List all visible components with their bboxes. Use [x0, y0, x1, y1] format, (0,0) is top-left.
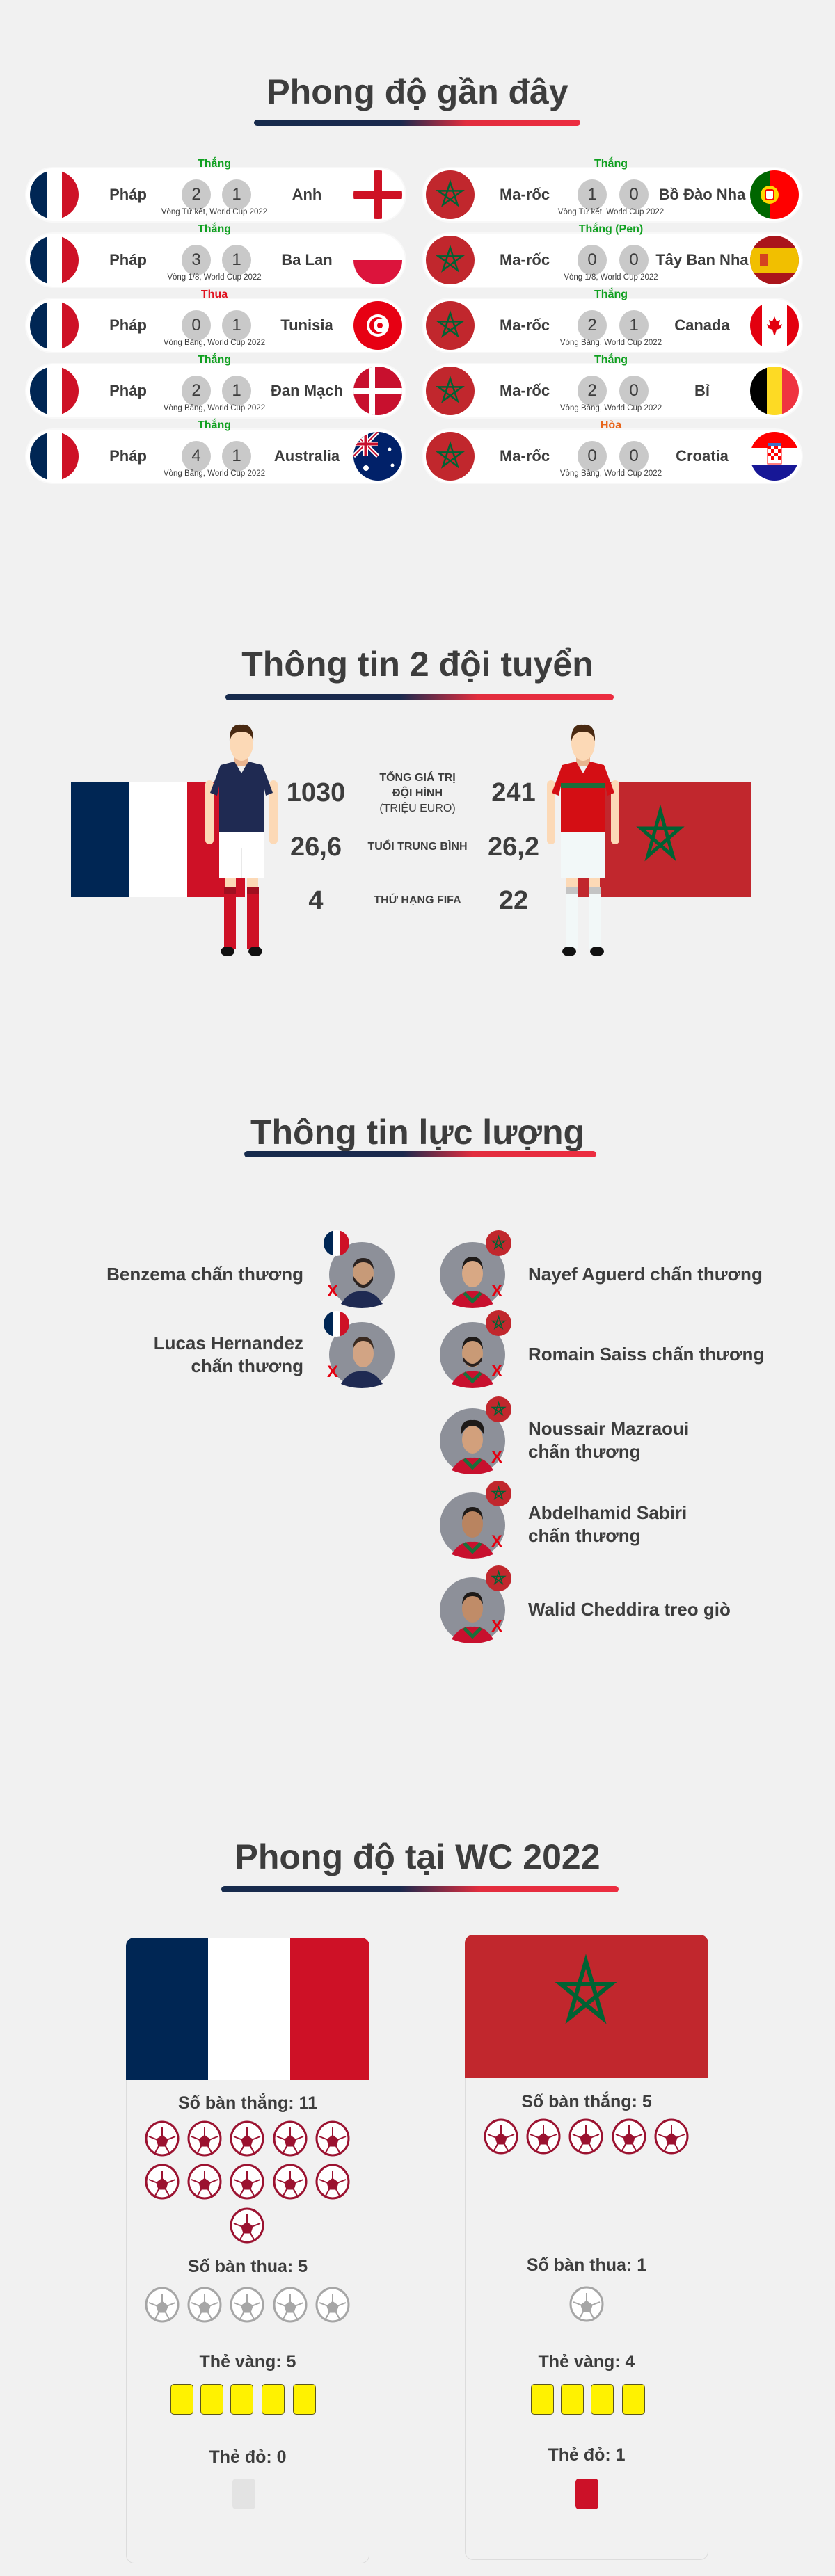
illustration: Morocco player [547, 725, 619, 956]
row: Noussair Mazraoui: chấn thương [528, 1441, 641, 1462]
stat: squad value: 1030 [287, 778, 345, 807]
photo: Lucas Hernandez [329, 1322, 395, 1388]
heading: goals conceded: Số bàn thua: 1 [527, 2255, 646, 2275]
panel: recent form France: Thua [201, 289, 228, 300]
heading: red cards: Thẻ đỏ: 1 [548, 2445, 626, 2465]
stat: average age: 26,6 [290, 832, 342, 862]
match: Morocco vs Spain: Tây Ban Nha [655, 251, 749, 268]
match: France vs England: Vòng Tứ kết, World Cup 2022 [161, 208, 267, 216]
badge: France flag [324, 1311, 349, 1337]
panel: recent form France: Thắng [198, 158, 231, 170]
match: France vs Poland: 1 [232, 250, 241, 269]
flag: France [71, 782, 245, 897]
heading: red cards: Thẻ đỏ: 0 [209, 2447, 287, 2467]
icon: grey ball [569, 2287, 604, 2321]
row: Romain Saiss [440, 1310, 764, 1388]
photo: Benzema [329, 1242, 395, 1308]
match: Morocco vs Belgium: Bỉ [694, 382, 710, 399]
match: Morocco vs Canada: 1 [629, 316, 639, 335]
text: Lucas Hernandez [154, 1333, 303, 1376]
row: Nayef Aguerd [440, 1230, 763, 1308]
match: France vs Tunisia [26, 299, 405, 352]
match: Morocco vs Croatia: 0 [629, 446, 639, 465]
match: Morocco vs Croatia: Croatia [676, 447, 729, 465]
match: Morocco vs Canada: Ma-rốc [500, 316, 550, 334]
match: France vs Australia: 4 [191, 446, 201, 465]
stat: average age: 26,2 [488, 832, 539, 862]
row: Abdelhamid Sabiri: chấn thương [528, 1525, 641, 1546]
heading: goals scored: Số bàn thắng: 11 [178, 2093, 317, 2113]
panel: Morocco absences [440, 1230, 764, 1643]
row: Walid Cheddira: X [491, 1617, 502, 1636]
title: Phong độ tại WC 2022: Phong độ tại WC 2022 [234, 1837, 601, 1876]
match: France vs England: 2 [191, 185, 201, 204]
row: Noussair Mazraoui: X [491, 1448, 502, 1467]
stat: squad value: TỔNG GIÁ TRỊ [379, 772, 456, 784]
icons: France yellow cards [170, 2384, 316, 2415]
row: Walid Cheddira [440, 1565, 731, 1643]
match: France vs Tunisia: Vòng Bảng, World Cup 2022 [164, 339, 265, 347]
match: France vs Australia: 1 [232, 446, 241, 465]
icon: red X: X [327, 1362, 338, 1381]
panel: France absences [106, 1230, 395, 1388]
panel: team comparison [71, 725, 752, 956]
match: France vs Denmark: 1 [232, 381, 241, 400]
match: France vs England: Anh [292, 186, 321, 203]
text: Lucas Hernandez: chấn thương [191, 1355, 303, 1376]
row: Walid Cheddira: Walid Cheddira treo giò [528, 1599, 731, 1620]
match: Morocco vs Portugal: Bồ Đào Nha [659, 186, 745, 203]
badge: France flag [324, 1230, 349, 1256]
match: France vs Tunisia: 0 [191, 316, 201, 335]
match: France vs Denmark: Pháp [109, 382, 147, 399]
panel: recent form Morocco: Thắng [594, 158, 628, 170]
text: Lucas Hernandez: Lucas Hernandez [154, 1333, 303, 1353]
flag: Morocco [465, 1935, 708, 2078]
panel: recent form Morocco: Thắng [594, 289, 628, 300]
match: Morocco vs Croatia: Vòng Bảng, World Cup 2022 [560, 469, 662, 478]
match: Morocco vs Canada: Canada [674, 316, 730, 334]
panel: France WC 2022 card [126, 1938, 369, 2563]
panel: recent form Morocco: Thắng [594, 354, 628, 366]
panel: recent form Morocco: Thắng (Pen) [579, 223, 643, 235]
match: Morocco vs Spain: Ma-rốc [500, 251, 550, 268]
row: Abdelhamid Sabiri [440, 1481, 687, 1559]
match: Morocco vs Croatia: Ma-rốc [500, 447, 550, 465]
match: Morocco vs Spain: 0 [587, 250, 597, 269]
match: Morocco vs Croatia: 0 [587, 446, 597, 465]
icons: Morocco yellow cards [531, 2384, 645, 2415]
match: France vs Tunisia: Pháp [109, 316, 147, 334]
title: Thông tin lực lượng: Thông tin lực lượng [250, 1113, 584, 1152]
panel: Morocco WC 2022 card [465, 1935, 708, 2560]
stat: FIFA ranking [308, 886, 528, 915]
stat: FIFA ranking: 22 [499, 886, 528, 915]
stat: squad value: (TRIỆU EURO) [379, 803, 456, 814]
match: Morocco vs Spain: 0 [629, 250, 639, 269]
icon: red card [575, 2479, 598, 2509]
row: Noussair Mazraoui: Noussair Mazraoui [528, 1418, 689, 1439]
match: Morocco vs Belgium: Vòng Bảng, World Cup 2022 [560, 404, 662, 412]
stat: average age: TUỔI TRUNG BÌNH [367, 841, 468, 853]
match: France vs England [26, 168, 405, 221]
heading: yellow cards: Thẻ vàng: 5 [200, 2352, 296, 2372]
icon: empty red card [232, 2479, 255, 2509]
panel: recent form France: Thắng [198, 354, 231, 366]
row: Abdelhamid Sabiri: Abdelhamid Sabiri [528, 1502, 687, 1523]
match: France vs England: 1 [232, 185, 241, 204]
panel: recent form Morocco [423, 157, 802, 483]
match: Morocco vs Canada: 2 [587, 316, 597, 335]
icons: 5 grey balls [145, 2287, 349, 2323]
match: Morocco vs Portugal: Ma-rốc [500, 186, 550, 203]
match: France vs Poland: Pháp [109, 251, 147, 268]
row: Noussair Mazraoui [440, 1396, 689, 1474]
flag: Morocco [578, 782, 752, 897]
stat: squad value: 241 [491, 778, 536, 807]
panel: recent form France: Thắng [198, 223, 231, 235]
match: France vs Denmark: Đan Mạch [271, 382, 343, 399]
stat: squad value: ĐỘI HÌNH [392, 787, 443, 799]
icons: 5 balls [484, 2118, 689, 2155]
match: France vs Australia [26, 430, 405, 483]
row: Abdelhamid Sabiri: X [491, 1532, 502, 1551]
match: France vs Denmark: Vòng Bảng, World Cup 2022 [164, 404, 265, 412]
match: France vs Tunisia: 1 [232, 316, 241, 335]
match: Morocco vs Portugal [423, 168, 802, 221]
match: France vs Poland: Vòng 1/8, World Cup 2022 [167, 273, 262, 282]
match: Morocco vs Belgium: Ma-rốc [500, 382, 550, 399]
match: Morocco vs Belgium: 0 [629, 381, 639, 400]
heading: yellow cards: Thẻ vàng: 4 [539, 2352, 635, 2372]
match: Morocco vs Belgium [423, 364, 802, 417]
match: Morocco vs Canada [423, 299, 802, 352]
title: Phong độ gần đây: Phong độ gần đây [267, 72, 568, 111]
match: France vs Denmark: 2 [191, 381, 201, 400]
heading: goals scored: Số bàn thắng: 5 [521, 2092, 652, 2111]
match: Morocco vs Croatia [423, 430, 802, 483]
panel: recent form France: Thắng [198, 419, 231, 431]
match: France vs Australia: Australia [274, 447, 340, 465]
icon: red X: X [327, 1282, 338, 1301]
match: France vs Australia: Pháp [109, 447, 147, 465]
flag: France [126, 1938, 369, 2080]
text: Benzema: Benzema chấn thương [106, 1264, 303, 1285]
match: Morocco vs Canada: Vòng Bảng, World Cup 2022 [560, 339, 662, 347]
title: Thông tin 2 đội tuyển: Thông tin 2 đội tuyển [241, 645, 594, 684]
row: Nayef Aguerd: X [491, 1282, 502, 1301]
stat: FIFA ranking: THỨ HẠNG FIFA [374, 894, 461, 906]
panel: recent form France [26, 157, 405, 483]
stat: average age [290, 832, 539, 862]
match: Morocco vs Spain [423, 234, 802, 287]
match: Morocco vs Spain: Vòng 1/8, World Cup 2022 [564, 273, 658, 282]
match: France vs Poland: 3 [191, 250, 201, 269]
match: Morocco vs Portugal: 1 [587, 185, 597, 204]
row: Nayef Aguerd: Nayef Aguerd chấn thương [528, 1264, 763, 1285]
heading: goals conceded: Số bàn thua: 5 [188, 2257, 308, 2276]
match: France vs Denmark [26, 364, 405, 417]
match: Morocco vs Belgium: 2 [587, 381, 597, 400]
stat: squad value [287, 771, 536, 814]
match: France vs Poland: Ba Lan [281, 251, 333, 268]
panel: recent form Morocco: Hòa [601, 419, 621, 431]
match: Morocco vs Portugal: 0 [629, 185, 639, 204]
match: France vs Tunisia: Tunisia [280, 316, 333, 334]
match: France vs Poland [26, 234, 405, 287]
icons: 11 balls [145, 2121, 349, 2244]
row: Romain Saiss: X [491, 1362, 502, 1380]
match: Morocco vs Portugal: Vòng Tứ kết, World Cup 2022 [558, 208, 664, 216]
stat: FIFA ranking: 4 [308, 886, 324, 915]
row: Romain Saiss: Romain Saiss chấn thương [528, 1344, 764, 1365]
match: France vs England: Pháp [109, 186, 147, 203]
illustration: France player [205, 725, 278, 956]
match: France vs Australia: Vòng Bảng, World Cup 2022 [164, 469, 265, 478]
